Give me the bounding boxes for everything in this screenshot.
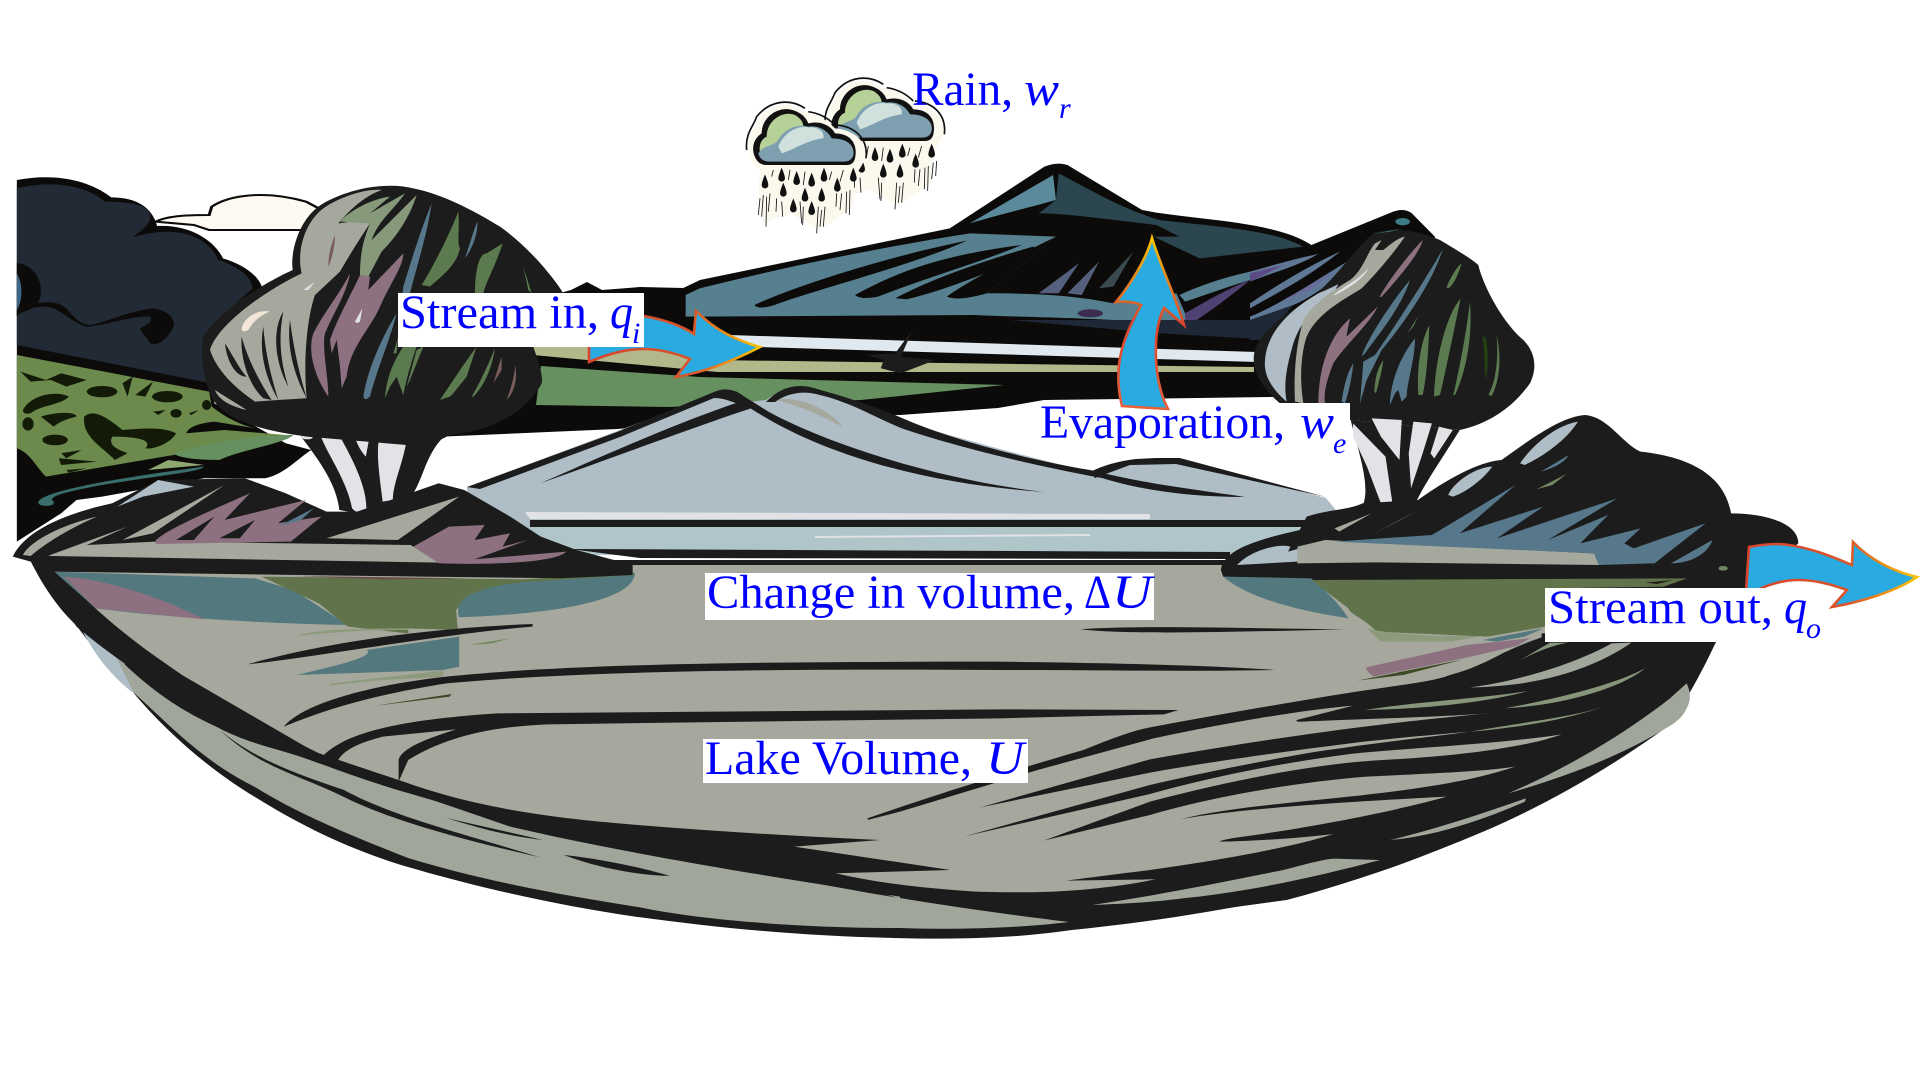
label: change in volume: Δ (1084, 566, 1111, 619)
panel: right tree (1250, 218, 1534, 430)
label: rain: w (1024, 63, 1059, 116)
label: lake volume: Lake Volume, (705, 732, 972, 785)
arrow: stream in (589, 311, 760, 377)
pale sliver outside left basin edge (76, 617, 142, 697)
lake water surface (50, 565, 1600, 925)
icon: twin rain clouds (746, 78, 945, 233)
label: evaporation: Evaporation, (1040, 396, 1285, 449)
arrow: stream out (1746, 542, 1917, 607)
rear rain cloud (825, 78, 945, 209)
label: lake volume: U (986, 732, 1028, 785)
panel: dark brush strokes in the lower right of the lake (863, 633, 1716, 937)
panel: far lake and field strips (533, 330, 1257, 407)
panel: left shore hill (13, 478, 633, 578)
arrow: evaporation (1116, 238, 1184, 409)
thick basin line (35, 567, 1000, 912)
panel: lake reflections and left-side black strokes (35, 567, 1000, 912)
panel: right shore hill (1221, 415, 1798, 642)
label: rain: Rain, (912, 63, 1013, 116)
label: stream out: q (1784, 581, 1807, 634)
panel: right tree trunk (1351, 418, 1460, 507)
label: stream out: o (1806, 612, 1821, 645)
panel: lake basin lower band (115, 655, 1069, 929)
front rain cloud (746, 102, 866, 233)
icon: small sailboat silhouette (866, 330, 935, 373)
reflection of right shore (1223, 566, 1728, 642)
panel: cream background cloud (156, 195, 347, 230)
label: evaporation (1037, 396, 1350, 460)
panel: left tree trunk (301, 431, 444, 513)
label: stream in: q (610, 286, 633, 339)
panel: dark storm sky and far-left hillside (17, 177, 311, 542)
label: stream in: i (632, 317, 640, 350)
label: rain (912, 63, 1071, 125)
label: stream out (1545, 581, 1822, 645)
label: stream in: Stream in, (400, 286, 599, 339)
panel: distant mountain range (683, 164, 1441, 340)
label: change in volume: Change in volume, (707, 566, 1075, 619)
label: rain: r (1059, 92, 1071, 125)
right tree crown (1254, 218, 1534, 430)
panel: lake basin outer shell (30, 560, 1745, 939)
label: evaporation: w (1300, 396, 1334, 449)
label: stream in (398, 286, 644, 350)
label: change in volume: U (1112, 566, 1156, 619)
panel: black ground band behind the far shore (433, 282, 1280, 437)
label: stream out: Stream out, (1548, 581, 1773, 634)
mountain slopes behind right tree (1250, 252, 1350, 340)
panel: pale grey-blue foothills (467, 386, 1340, 559)
panel: left tree crown (202, 186, 563, 447)
reflection of left shore (54, 572, 635, 706)
label: evaporation: e (1333, 427, 1346, 460)
panel: long strokes across the middle of the lake (1000, 627, 1345, 718)
water patch closing seams between strokes (863, 807, 1182, 891)
